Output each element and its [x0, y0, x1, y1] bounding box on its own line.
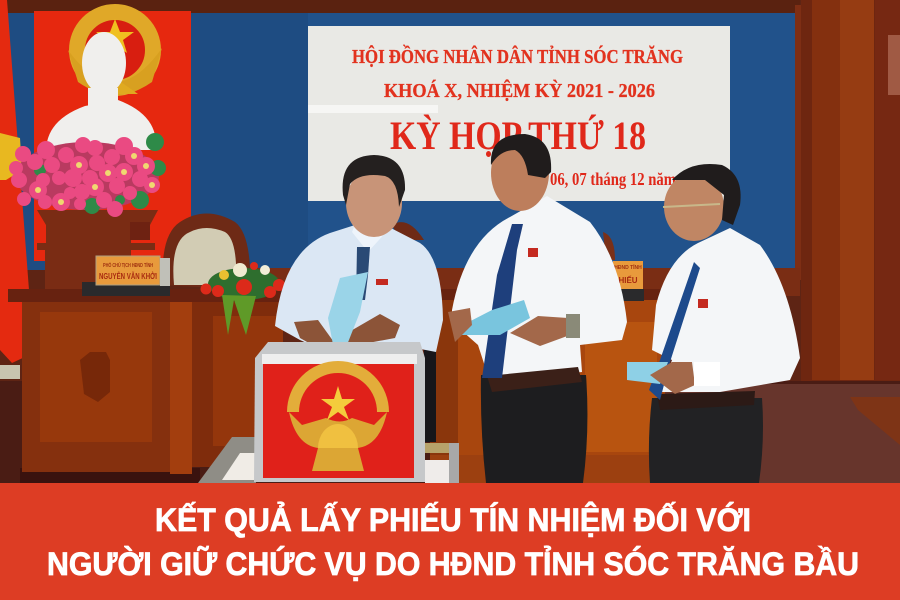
sign session line: KỲ HỌP THỨ 18 — [390, 113, 646, 158]
sign term line: KHOÁ X, NHIỆM KỲ 2021 - 2026 — [384, 79, 655, 102]
title line 1: KẾT QUẢ LẤY PHIẾU TÍN NHIỆM ĐỐI VỚI — [155, 502, 751, 538]
sign date line: 06, 07 tháng 12 năm — [550, 169, 676, 189]
ballot box — [254, 342, 425, 482]
flag — [0, 0, 29, 363]
wooden desk — [8, 289, 665, 483]
bust statue — [47, 32, 155, 150]
flower pedestal — [37, 210, 158, 290]
national emblem on wall — [68, 12, 162, 95]
official center: white shirt — [448, 134, 627, 483]
title line 2: NGƯỜI GIỮ CHỨC VỤ DO HĐND TỈNH SÓC TRĂNG BẦU — [47, 546, 859, 582]
carved chair — [163, 214, 250, 290]
ballot tray — [198, 437, 459, 483]
lotus flower arrangement — [9, 133, 166, 217]
sign title line: HỘI ĐỒNG NHÂN DÂN TỈNH SÓC TRĂNG — [352, 44, 683, 68]
table flower bouquet — [200, 262, 285, 335]
box emblem — [289, 367, 387, 471]
election banner sign — [308, 26, 730, 201]
floor step at right — [850, 397, 900, 445]
desk background wall panel — [250, 268, 800, 296]
flag star section — [0, 133, 22, 180]
left nameplate: NGUYỄN VĂN KHỞI — [99, 270, 157, 281]
right nameplate: HĐND TỈNH — [614, 264, 642, 271]
right nameplate: HIẾU — [618, 275, 638, 285]
right nameplate — [613, 261, 644, 301]
chair behind first official — [392, 222, 424, 240]
official left: light blue shirt — [275, 155, 443, 442]
left nameplate — [82, 256, 170, 296]
left nameplate: PHÓ CHỦ TỊCH HĐND TỈNH — [103, 261, 153, 269]
red backdrop banner — [34, 11, 191, 261]
flag stand — [0, 365, 20, 379]
chair behind center official — [603, 232, 615, 260]
official right: white shirt — [627, 164, 800, 483]
bottom red title band — [0, 483, 900, 600]
